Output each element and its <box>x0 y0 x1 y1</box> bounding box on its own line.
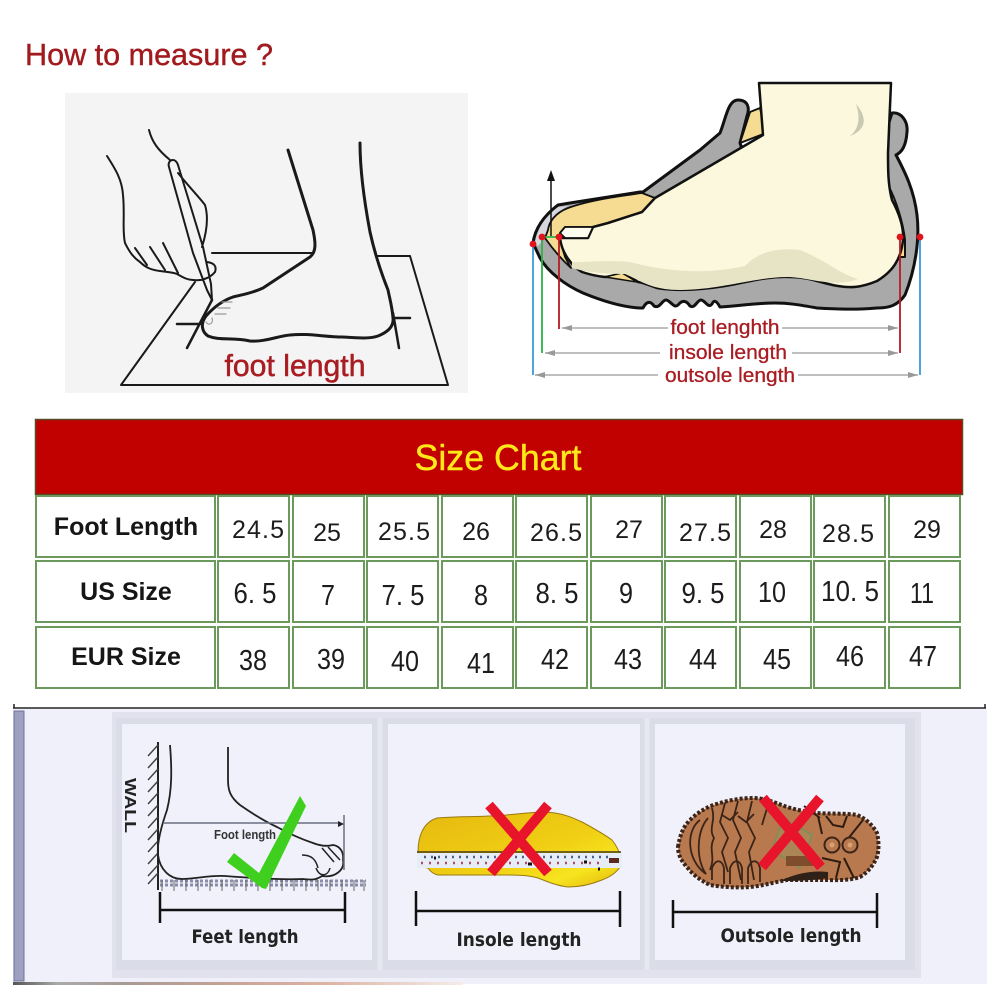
dimension labels: foot lenghth <box>670 317 780 339</box>
gray sole and heel <box>533 100 918 309</box>
measurement marks <box>177 300 410 348</box>
row: foot length: 28.5 <box>822 520 874 548</box>
row: US size: 8 <box>474 580 488 612</box>
row: EUR size: 43 <box>614 644 642 676</box>
row: EUR size: 45 <box>763 644 791 676</box>
row: EUR size: 40 <box>391 646 419 678</box>
panel: shoe cross-section diagram <box>530 83 923 387</box>
toe gap <box>560 227 593 238</box>
panel: measuring comparison <box>13 704 987 985</box>
foot length arrow <box>163 815 344 870</box>
panel: foot tracing illustration <box>65 93 468 393</box>
bracket <box>160 892 345 923</box>
insole <box>418 812 620 887</box>
red measuring dots <box>530 234 923 247</box>
pale toe shell <box>535 206 568 246</box>
yellow arch lining <box>605 273 637 282</box>
foot length label: foot length <box>224 348 366 383</box>
row: US size: 6. 5 <box>234 578 276 610</box>
row: foot length: 29 <box>913 516 941 544</box>
outsole <box>678 798 878 887</box>
card: outsole length (wrong) <box>655 724 905 960</box>
row: US size: 10 <box>758 577 786 609</box>
card: feet length (correct): Foot length <box>214 828 276 842</box>
row: foot length: 24.5 <box>232 516 284 544</box>
wall <box>157 742 159 890</box>
yellow heel lining <box>888 185 905 257</box>
row: US size: 10. 5 <box>821 576 879 608</box>
row: EUR size: 41 <box>467 648 495 680</box>
row: US size <box>36 561 960 622</box>
row: EUR size: 38 <box>239 645 267 677</box>
row: US size: 7 <box>321 580 335 612</box>
row: EUR size: 46 <box>836 641 864 673</box>
bracket <box>416 891 620 927</box>
row: EUR size: 47 <box>909 641 937 673</box>
row: foot length: 26 <box>462 518 490 546</box>
size chart header <box>36 420 962 494</box>
red foot measure lines <box>559 237 900 353</box>
label: Insole length <box>456 929 582 951</box>
hand and pencil <box>107 130 216 300</box>
title: How to measure ? <box>25 37 273 72</box>
dimension labels <box>665 317 795 387</box>
blue outsole measure lines <box>533 237 920 375</box>
dimension labels: outsole length <box>665 365 795 387</box>
yellow tongue <box>740 108 766 143</box>
row: US size: 7. 5 <box>382 580 424 612</box>
icon: red cross <box>762 798 821 867</box>
card: insole length (wrong) <box>388 724 640 960</box>
bracket <box>673 893 877 928</box>
row: foot length: 27 <box>615 516 643 544</box>
size chart header: Size Chart <box>414 438 582 478</box>
label: Outsole length <box>720 925 862 947</box>
measuring arrow <box>550 178 552 236</box>
row: foot length: 26.5 <box>530 519 582 547</box>
gray dimension lines <box>535 328 918 375</box>
green insole measure lines <box>542 237 559 353</box>
yellow toe lining <box>545 193 655 268</box>
label: Feet length <box>192 926 298 948</box>
card: feet length (correct): WALL <box>121 778 138 833</box>
dimension labels: insole length <box>669 342 787 364</box>
row: EUR size: 44 <box>689 644 717 676</box>
row: US size: 9 <box>619 578 633 610</box>
row: US size: 9. 5 <box>682 578 724 610</box>
row: US size: 8. 5 <box>536 578 578 610</box>
icon: red cross <box>489 805 548 873</box>
icon: green check <box>227 796 306 889</box>
toe details <box>206 302 232 324</box>
row: foot length: Foot Length <box>54 513 198 541</box>
ankle mark <box>850 104 864 136</box>
row: foot length: 25.5 <box>378 518 430 546</box>
paper sheet <box>121 253 448 385</box>
card: feet length (correct) <box>121 724 372 960</box>
row: EUR size: 42 <box>541 644 569 676</box>
row: US size: 11 <box>910 578 934 610</box>
foot <box>560 83 903 290</box>
row: foot length: 25 <box>313 519 341 547</box>
row: foot length: 28 <box>759 516 787 544</box>
ruler <box>160 881 366 885</box>
row: US size: US Size <box>80 578 172 606</box>
row: EUR size: EUR Size <box>71 643 181 671</box>
row: EUR size <box>36 627 960 688</box>
size chart table <box>36 420 962 688</box>
foot against wall <box>158 745 343 880</box>
foot outline <box>202 143 393 341</box>
row: EUR size: 39 <box>317 644 345 676</box>
row: foot length: 27.5 <box>679 519 731 547</box>
foot sole shading <box>572 249 858 290</box>
row: foot length <box>36 496 960 557</box>
